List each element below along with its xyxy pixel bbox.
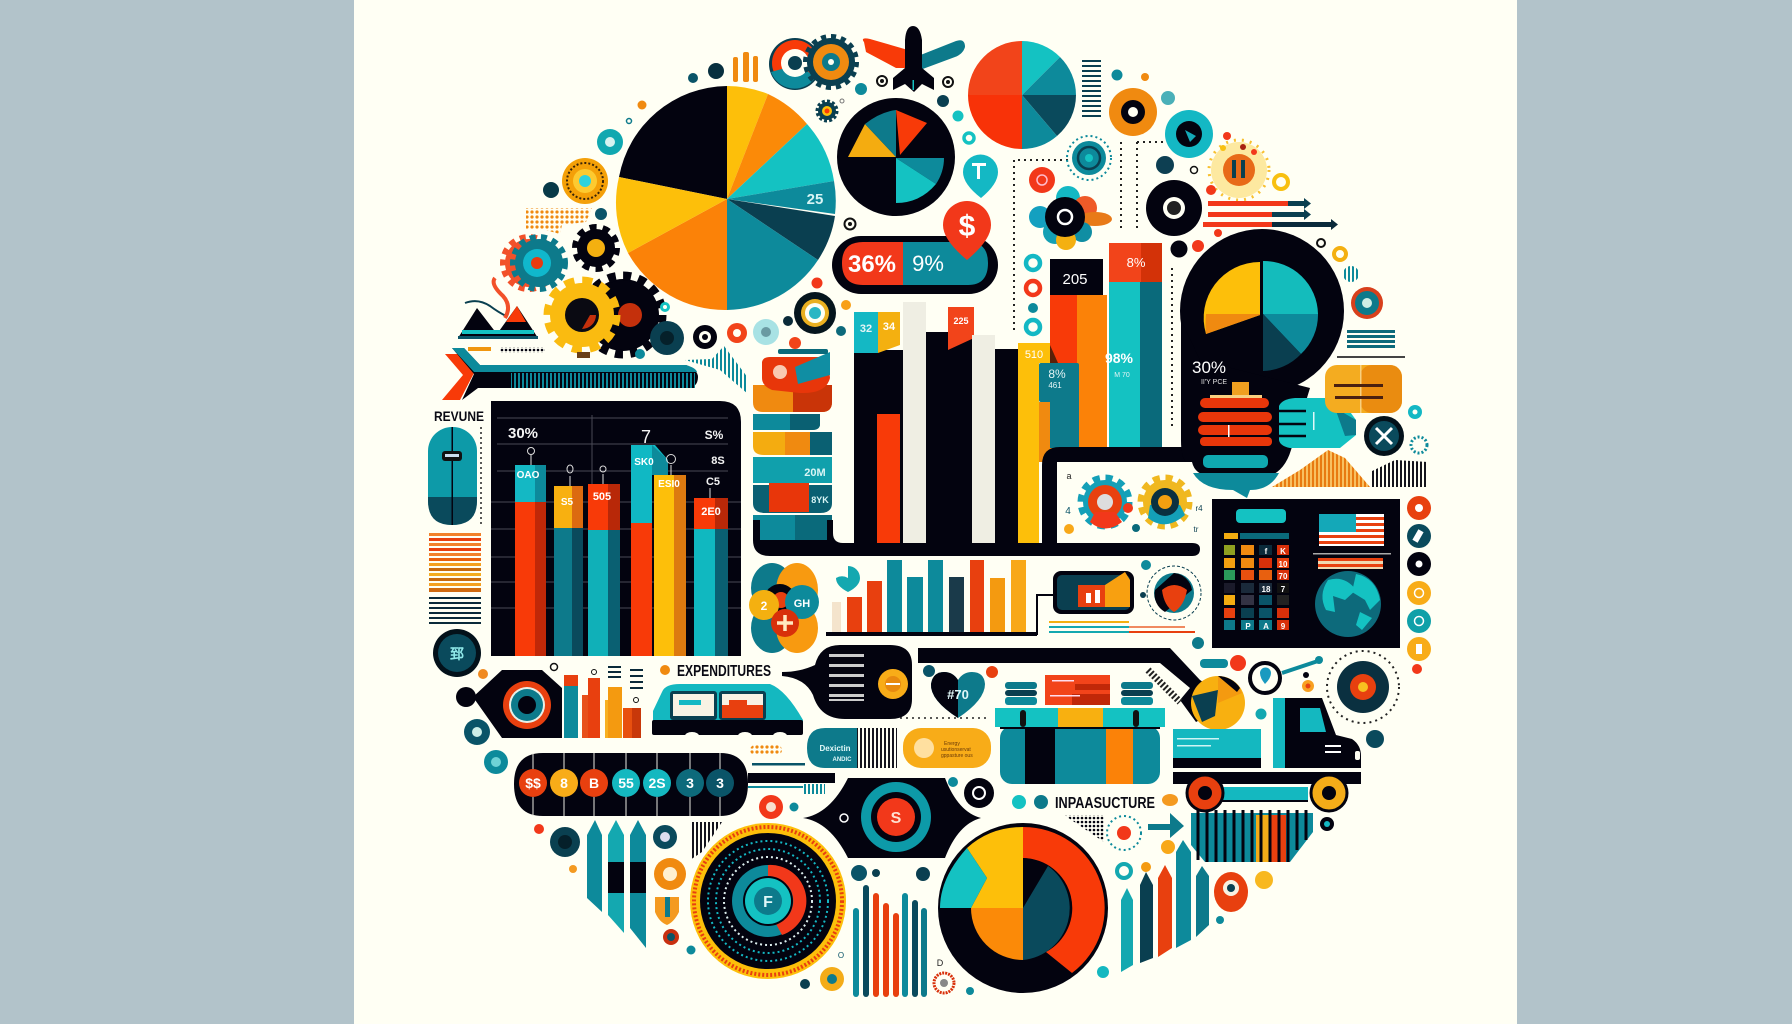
eye panel: S [891,810,902,827]
ring: black [948,777,994,808]
value labels: C5 [706,476,720,488]
bar from pill [748,773,835,794]
gear: big black [584,276,662,354]
red card [1045,675,1110,705]
bar: cyan teal 98%: 8% [1127,255,1146,270]
panel: revenue bar chart [491,401,741,656]
flower cluster [749,563,819,653]
table grid: f [1265,547,1268,556]
panel: gears box: 4 [1065,506,1071,517]
heading: expenditures [660,663,771,680]
table grid [1224,545,1289,631]
red badge small [759,795,798,819]
pill: 36% and 9% [832,236,998,294]
mountain icon [458,278,538,339]
macaron right [1121,682,1153,705]
table grid: 7 [1281,585,1286,594]
arrow banner [442,347,698,400]
bar 2: S5 [561,497,574,508]
bottom gears and dots: O [838,951,844,960]
ring icon [693,325,717,349]
panel: gears box: tr [1194,525,1199,534]
dial with red shield [1140,560,1201,620]
pie chart: bottom ring [938,823,1108,993]
arrows: three progress arrows [1203,198,1338,230]
panel: gears box [1064,471,1203,534]
panel: gears box: r4 [1195,504,1203,513]
dotted dial right [1327,651,1399,723]
gradient lines [1049,621,1195,633]
panel: database stack: 8YK [811,495,829,505]
pill icon teal [428,427,477,525]
eye panel [803,778,981,858]
tag with lens [456,670,562,738]
squiggle [750,745,805,766]
badge dark teal: 郅 [450,646,464,662]
panel: lightbulb: II'Y PCE [1201,379,1227,386]
pin: dollar [943,201,991,260]
speech panel list [782,645,912,719]
arrow and dotted dial [1064,813,1184,850]
dotted connectors top right [1014,142,1166,330]
value labels: 7 [641,427,651,447]
halftone swatch [526,208,592,234]
truck [1173,698,1361,811]
ring: yellow [1274,175,1288,189]
flower cluster: GH [794,598,810,610]
black pill with circles: B [589,775,599,791]
magnifier and tool [1200,655,1323,693]
dots top right [1112,70,1231,174]
panel: gears box: a [1066,471,1072,481]
road arrow [918,648,1215,722]
bar 5: ESI0 [658,479,680,490]
donut: orange [1109,88,1157,136]
striped swatch orange [429,533,481,592]
concentric dial large: F [763,894,773,911]
hand [1275,398,1356,448]
stripe swatch and rule [1337,328,1405,358]
target: black yellow cyan [794,292,836,334]
target ring icon [769,38,821,90]
bulb pie chart [1204,261,1318,371]
panel: central bar chart: 32 [860,323,872,335]
concentric teal dial [1067,136,1111,180]
panel: flag dashboard [1212,499,1400,648]
table grid: 10 [1279,560,1288,569]
panel: basket [995,675,1165,784]
donut: black [1146,180,1202,236]
bar: cyan teal 98%: M 70 [1114,372,1130,379]
bar 4 [631,445,668,656]
globe [1315,571,1381,637]
stacked pads [1198,382,1272,446]
gear: teal and red [503,237,565,289]
bar 4: SK0 [634,457,654,468]
left side band [0,0,354,1024]
panel: central bar chart: 225 [953,316,969,326]
black pill with circles [514,753,748,816]
striped box [1191,810,1313,862]
heading: infrastructure: INPAASUCTURE [1055,795,1155,812]
orange pill: Energy [944,741,960,747]
bar 3 [588,484,620,656]
diagonal tick strip [1148,670,1180,702]
bar 1: OAO [517,470,540,481]
dotted line by pill [480,427,482,525]
table grid: 18 [1262,585,1271,594]
orange pill: usutionservat [941,747,971,753]
pin: teal [963,154,998,198]
pie: yellow orange [1191,676,1245,730]
table grid: A [1263,622,1269,631]
panel: central bar chart [854,302,1018,543]
dotted connector [844,372,846,525]
dots above bulb [1170,229,1359,282]
concentric dial large [690,823,846,979]
bar 3: 505 [593,491,611,503]
gear: big yellow [548,281,616,358]
teal pill with barcode: ANDIC [832,757,852,763]
pie chart: large top: 25 [807,191,823,208]
sunburst [1206,140,1269,200]
black pill with circles: 3 [716,775,724,791]
bottom gears and dots: D [937,958,944,968]
bottom gears and dots [800,951,974,995]
mountain stripe charts [1272,450,1428,487]
table grid: P [1245,622,1251,631]
bar: yellow 510 [1018,343,1050,543]
table grid: K [1280,547,1286,556]
pie chart: large top [616,86,836,310]
bottom left dots [534,824,696,954]
value labels: 30% [508,425,538,442]
pin: dollar: $ [959,210,976,243]
white divider pill [833,345,853,543]
dark disc [650,321,684,355]
bar 2 [554,486,583,656]
flag [1319,514,1384,546]
bar: red and orange 205: 205 [1062,271,1088,288]
airplane icon [863,26,965,92]
bar: teal box 9%: 8% [1048,367,1066,381]
wedge stripes [690,822,722,860]
right side band [1517,0,1792,1024]
black pill with circles: 55 [618,775,634,791]
teal pill with barcode [807,728,897,768]
teal pill with barcode: Dexictin [819,744,851,753]
gear: yellow teal [1141,478,1189,526]
macaron left [1005,682,1037,705]
small dots left [464,669,508,774]
speech tile: orange [1325,365,1402,413]
orange pill [903,728,991,768]
gear icon: orange [806,37,856,87]
donut: cyan [1165,110,1213,158]
value labels: S% [705,428,724,442]
bar: red and orange 205 [1050,259,1107,447]
target: orange dotted [562,158,608,204]
pencils left [587,820,646,948]
heart badge [923,665,998,718]
bar 1 [515,465,546,656]
value labels [508,425,725,488]
pattern disc [753,319,779,345]
connector and phone [1037,571,1134,635]
heart badge: #70 [947,687,969,702]
bar: teal box 9% [1039,363,1079,448]
teal red ring column [1026,256,1040,334]
dotted vertical by bulb [1171,268,1173,428]
orange pill: gppasture ous [941,753,973,759]
bar: yellow 510: 510 [1025,349,1043,361]
heading: expenditures: EXPENDITURES [677,663,771,680]
table grid: 70 [1279,572,1288,581]
panel: revenue label: REVUNE [434,408,484,424]
pie chart: red and teal [968,41,1076,149]
bar: teal box 9%: 461 [1048,381,1062,390]
orange tally bars [733,52,758,82]
bottom right dots [1097,817,1334,978]
flower cluster: 2 [761,599,768,613]
bar: orange lower [1039,402,1053,462]
mini bars expenditures [550,664,643,738]
small gear heart [817,99,844,121]
right dots by hand [1364,405,1427,456]
thin bars cluster [851,865,930,997]
stripe wedge [685,346,748,394]
red badge [1029,167,1055,193]
base rail [753,447,1200,556]
pill: 36% and 9%: 36% [848,251,896,278]
badge dark teal [433,629,481,677]
panel: lightbulb [1180,229,1344,498]
bar 6: 2E0 [701,506,721,518]
red gear badge [1351,287,1383,319]
black pill with circles: 2S [648,775,666,791]
panel: central bar chart: 34 [883,321,896,333]
gear: teal red [1081,478,1129,528]
panel: database stack [753,337,832,542]
black pill with circles: 8 [560,775,568,791]
flower icon [1029,186,1112,250]
pencils right [1121,840,1209,972]
value labels: 8S [711,455,725,467]
black pill with circles: 3 [686,775,694,791]
gear: black with yellow centre [575,227,617,269]
pill: 36% and 9%: 9% [912,251,944,276]
panel: lightbulb: 30% [1192,358,1226,377]
bar 5 [654,475,686,656]
striped swatch dark [429,597,481,624]
scattered dots near target [635,218,856,359]
striped block [1082,60,1101,117]
heading: infrastructure [1012,794,1178,812]
dotted under heart [900,717,990,719]
table grid: 9 [1281,622,1286,631]
bus icon [652,684,803,740]
right badge column [1407,496,1431,674]
heart badge [727,323,747,343]
small rings and dots around plane [855,76,974,143]
black pill with circles: $$ [525,775,541,791]
small bar chart [826,560,1037,636]
circular donut: mini pie top centre [837,98,955,216]
dots near tally [688,63,724,83]
panel: database stack: 20M [804,467,826,479]
dots left of large pie [543,100,646,220]
bar: cyan teal 98% [1105,243,1162,447]
bar 6 [694,498,728,656]
bar: cyan teal 98%: 98% [1105,350,1134,366]
